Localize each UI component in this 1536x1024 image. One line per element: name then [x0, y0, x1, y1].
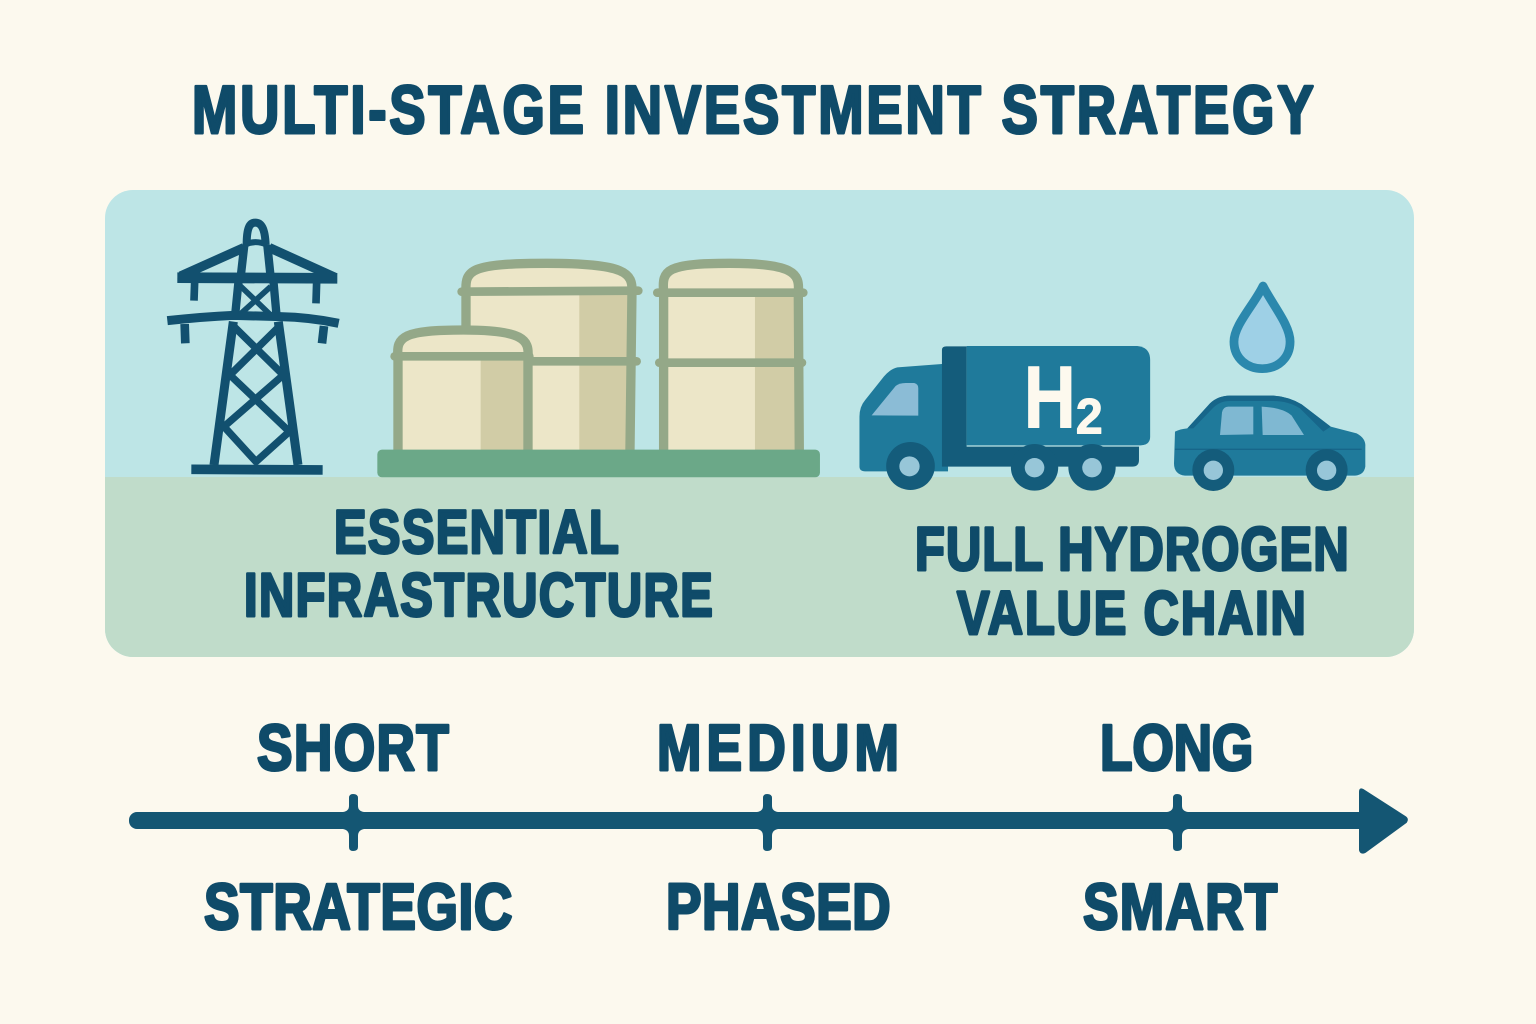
label: H2: H: [1024, 347, 1076, 447]
title: MULTI-STAGE INVESTMENT STRATEGY: [192, 72, 1314, 148]
label: full hydrogen value chain: VALUE CHAIN: [957, 579, 1306, 647]
label: essential infrastructure: INFRASTRUCTURE: [244, 561, 713, 629]
icon: hydrogen truck: [859, 346, 1150, 491]
right tank: [657, 263, 803, 450]
timeline: [129, 711, 1407, 943]
label: smart: SMART: [1083, 870, 1277, 943]
label: phased: PHASED: [666, 870, 891, 943]
label: H2: 2: [1076, 388, 1103, 444]
icon: hydrogen drop: [1234, 286, 1290, 369]
icon: car: [1174, 396, 1365, 491]
label: full hydrogen value chain: [915, 515, 1349, 647]
label: medium: MEDIUM: [657, 711, 899, 784]
timeline arrow: [129, 789, 1407, 853]
icon: transmission tower: [167, 223, 339, 470]
label: long: LONG: [1100, 711, 1253, 784]
label: essential infrastructure: [244, 498, 713, 629]
tank base: [377, 450, 820, 477]
label: short: SHORT: [257, 711, 449, 784]
icon: storage tanks: [377, 263, 820, 477]
label: full hydrogen value chain: FULL HYDROGEN: [915, 515, 1349, 583]
front left tank: [395, 330, 529, 450]
panel: infrastructure and value chain scene: [105, 190, 1414, 657]
back middle tank: [462, 263, 638, 450]
label: essential infrastructure: ESSENTIAL: [334, 498, 619, 566]
label: strategic: STRATEGIC: [204, 870, 512, 943]
